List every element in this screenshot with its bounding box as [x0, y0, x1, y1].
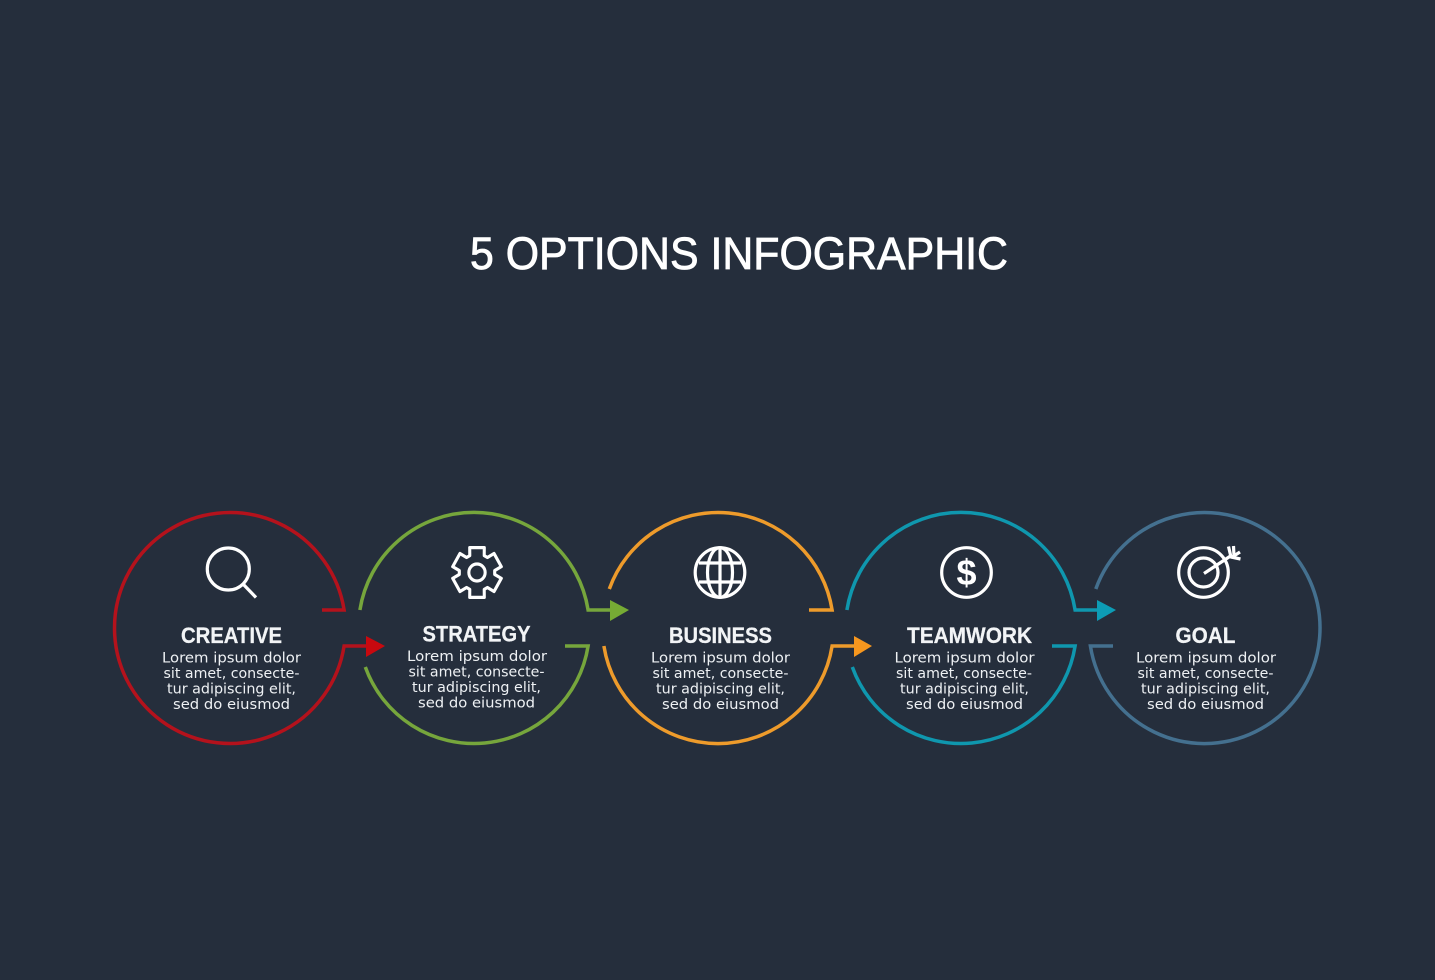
description: business: [651, 650, 790, 713]
description: business: sed do eiusmod: [662, 697, 779, 713]
panel: teamwork: [847, 512, 1116, 743]
description: creative: tur adipiscing elit,: [167, 682, 296, 698]
icon: target with arrow: [1179, 546, 1240, 597]
panel: business: [604, 513, 872, 744]
description: creative: sed do eiusmod: [173, 697, 290, 713]
description: strategy: sed do eiusmod: [418, 696, 535, 712]
description: goal: Lorem ipsum dolor: [1136, 650, 1276, 666]
panel: creative: [115, 512, 385, 744]
description: goal: sit amet, consecte-: [1138, 666, 1274, 682]
icon: gear: [453, 548, 501, 597]
panel: goal: [1090, 513, 1320, 744]
title: 5 OPTIONS INFOGRAPHIC: [470, 228, 1008, 279]
teal ring with arrow: [847, 512, 1116, 743]
icon: dollar coin: $: [956, 552, 977, 593]
description: teamwork: sit amet, consecte-: [896, 666, 1032, 682]
description: teamwork: Lorem ipsum dolor: [894, 650, 1035, 666]
description: teamwork: tur adipiscing elit,: [900, 682, 1029, 698]
description: goal: tur adipiscing elit,: [1141, 682, 1270, 698]
description: strategy: [407, 649, 547, 712]
description: business: Lorem ipsum dolor: [651, 650, 790, 666]
green ring with arrow: [360, 512, 629, 743]
description: goal: [1136, 650, 1276, 713]
panel: strategy: [360, 512, 629, 743]
icon: dollar coin: [942, 548, 991, 597]
heading: goal: GOAL: [1176, 623, 1236, 648]
blue ring: [1090, 513, 1320, 744]
description: goal: sed do eiusmod: [1147, 697, 1264, 713]
description: creative: Lorem ipsum dolor: [162, 650, 301, 666]
icon: globe: [695, 548, 745, 597]
description: teamwork: [894, 650, 1035, 713]
description: business: sit amet, consecte-: [652, 666, 788, 682]
description: teamwork: sed do eiusmod: [906, 697, 1023, 713]
red ring with arrow: [115, 512, 385, 744]
description: business: tur adipiscing elit,: [656, 682, 785, 698]
heading: creative: CREATIVE: [181, 623, 282, 648]
orange ring with arrow: [604, 513, 872, 744]
description: creative: sit amet, consecte-: [164, 666, 300, 682]
heading: business: BUSINESS: [669, 623, 772, 648]
heading: strategy: STRATEGY: [422, 622, 531, 646]
description: strategy: Lorem ipsum dolor: [407, 649, 547, 665]
description: creative: [162, 650, 301, 713]
icon: magnifier: [207, 548, 256, 598]
description: strategy: tur adipiscing elit,: [412, 680, 541, 696]
description: strategy: sit amet, consecte-: [408, 664, 544, 680]
heading: teamwork: TEAMWORK: [907, 623, 1032, 648]
